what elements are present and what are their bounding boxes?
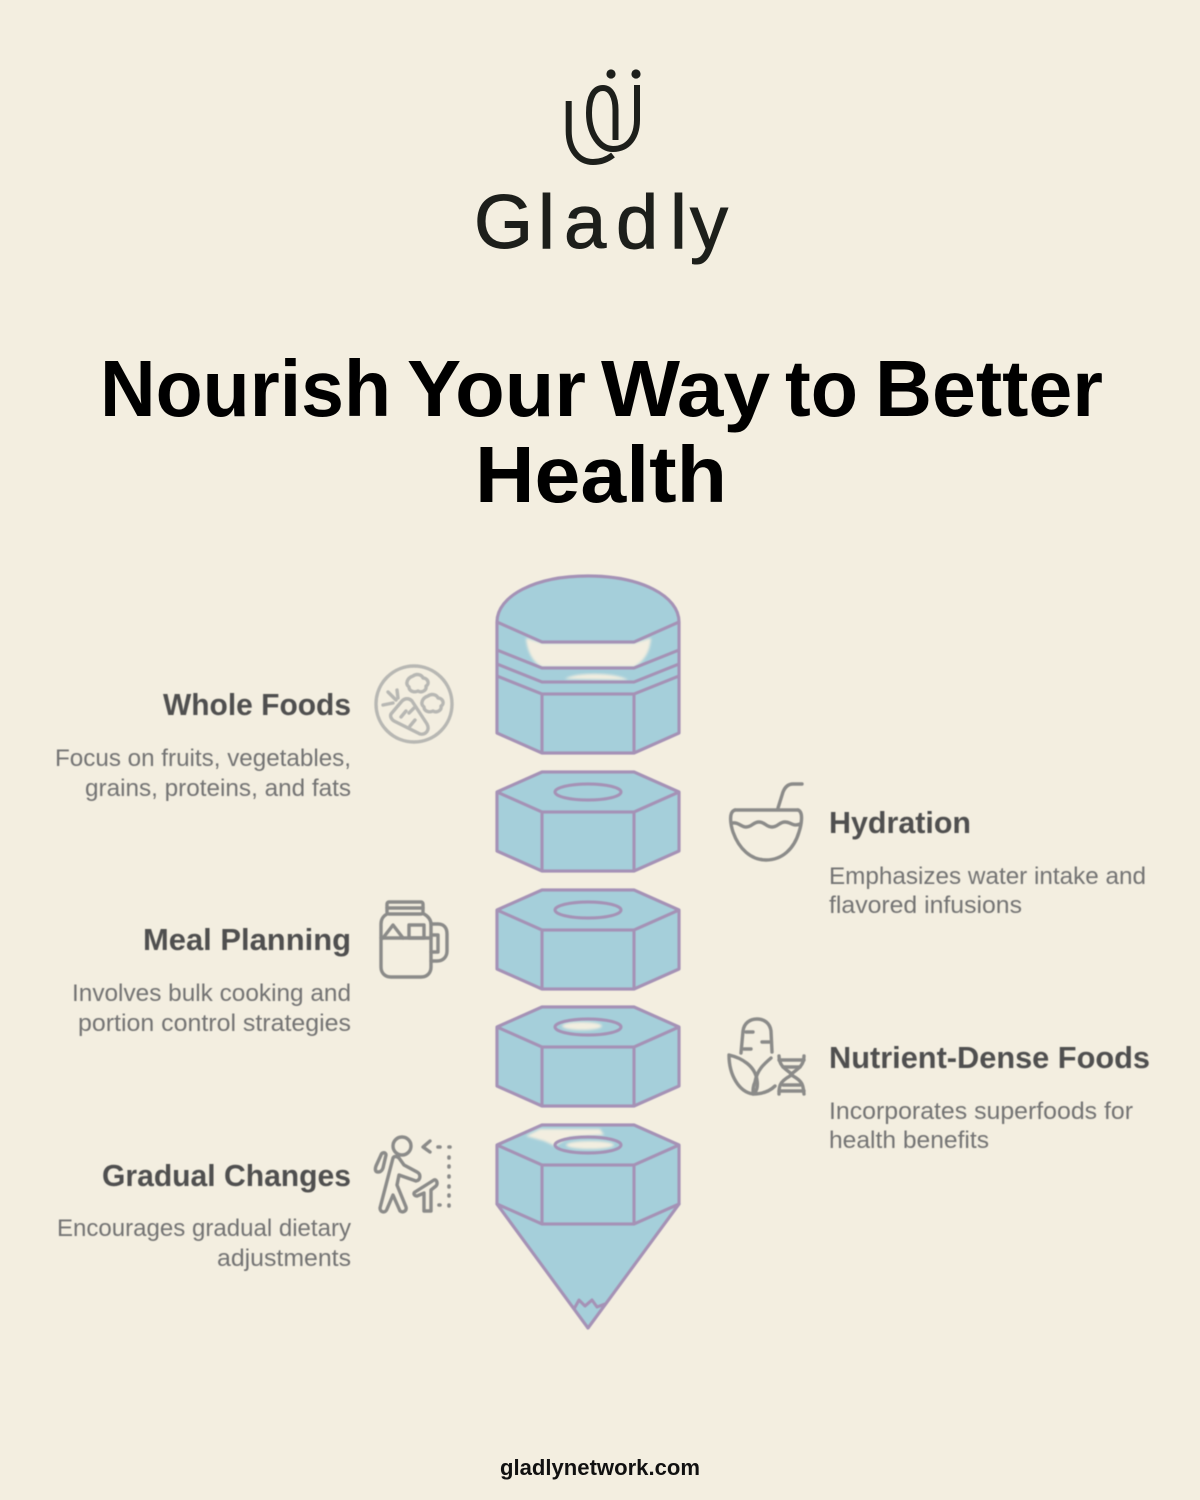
title: Way (601, 344, 771, 433)
panel: meal planning (72, 922, 351, 1037)
panel: gradual changes: adjustments (217, 1245, 351, 1272)
panel: whole foods: Focus on fruits, vegetables, (55, 745, 351, 772)
panel: gradual changes (57, 1158, 351, 1272)
panel: whole foods (55, 687, 351, 802)
cone tip (497, 1204, 679, 1328)
panel: gradual changes: Gradual Changes (102, 1158, 351, 1193)
panel: hydration: Hydration (829, 805, 971, 840)
panel: hydration: flavored infusions (829, 892, 1022, 919)
icon: corn and dna (729, 1019, 804, 1094)
title: Health (475, 430, 727, 519)
icon: walking person (375, 1137, 450, 1212)
panel: nutrient-dense foods: health benefits (829, 1127, 989, 1154)
nut segment 5 (497, 1125, 679, 1224)
panel: hydration (829, 805, 1146, 919)
title: Nourish (100, 344, 391, 433)
icon: mason jar (381, 902, 447, 977)
logo wordmark: Gladly (474, 180, 728, 265)
stacked hex nut diagram (497, 576, 679, 1328)
title (100, 344, 1103, 519)
nut segment 4 (497, 1007, 679, 1106)
icon: coconut drink (731, 784, 802, 860)
title: to (785, 344, 858, 433)
logo mark (569, 69, 641, 162)
panel: whole foods: grains, proteins, and fats (85, 775, 351, 802)
panel: whole foods: Whole Foods (163, 687, 351, 722)
nut segment 3 (497, 890, 679, 989)
panel: hydration: Emphasizes water intake and (829, 863, 1146, 890)
nut segment 2 (497, 772, 679, 871)
panel: nutrient-dense foods: Nutrient-Dense Foods (829, 1040, 1150, 1075)
panel: nutrient-dense foods (829, 1040, 1150, 1154)
panel: meal planning: portion control strategies (78, 1010, 351, 1037)
panel: gradual changes: Encourages gradual dietary (57, 1215, 351, 1242)
panel: nutrient-dense foods: Incorporates superfoods for (829, 1098, 1133, 1125)
top cap segment (497, 576, 679, 753)
panel: meal planning: Meal Planning (143, 922, 351, 957)
panel: meal planning: Involves bulk cooking and (72, 980, 351, 1007)
icon: carrot plate (376, 666, 452, 742)
title: Your (407, 344, 586, 433)
title: Better (875, 344, 1103, 433)
footer url: gladlynetwork.com (500, 1455, 700, 1480)
